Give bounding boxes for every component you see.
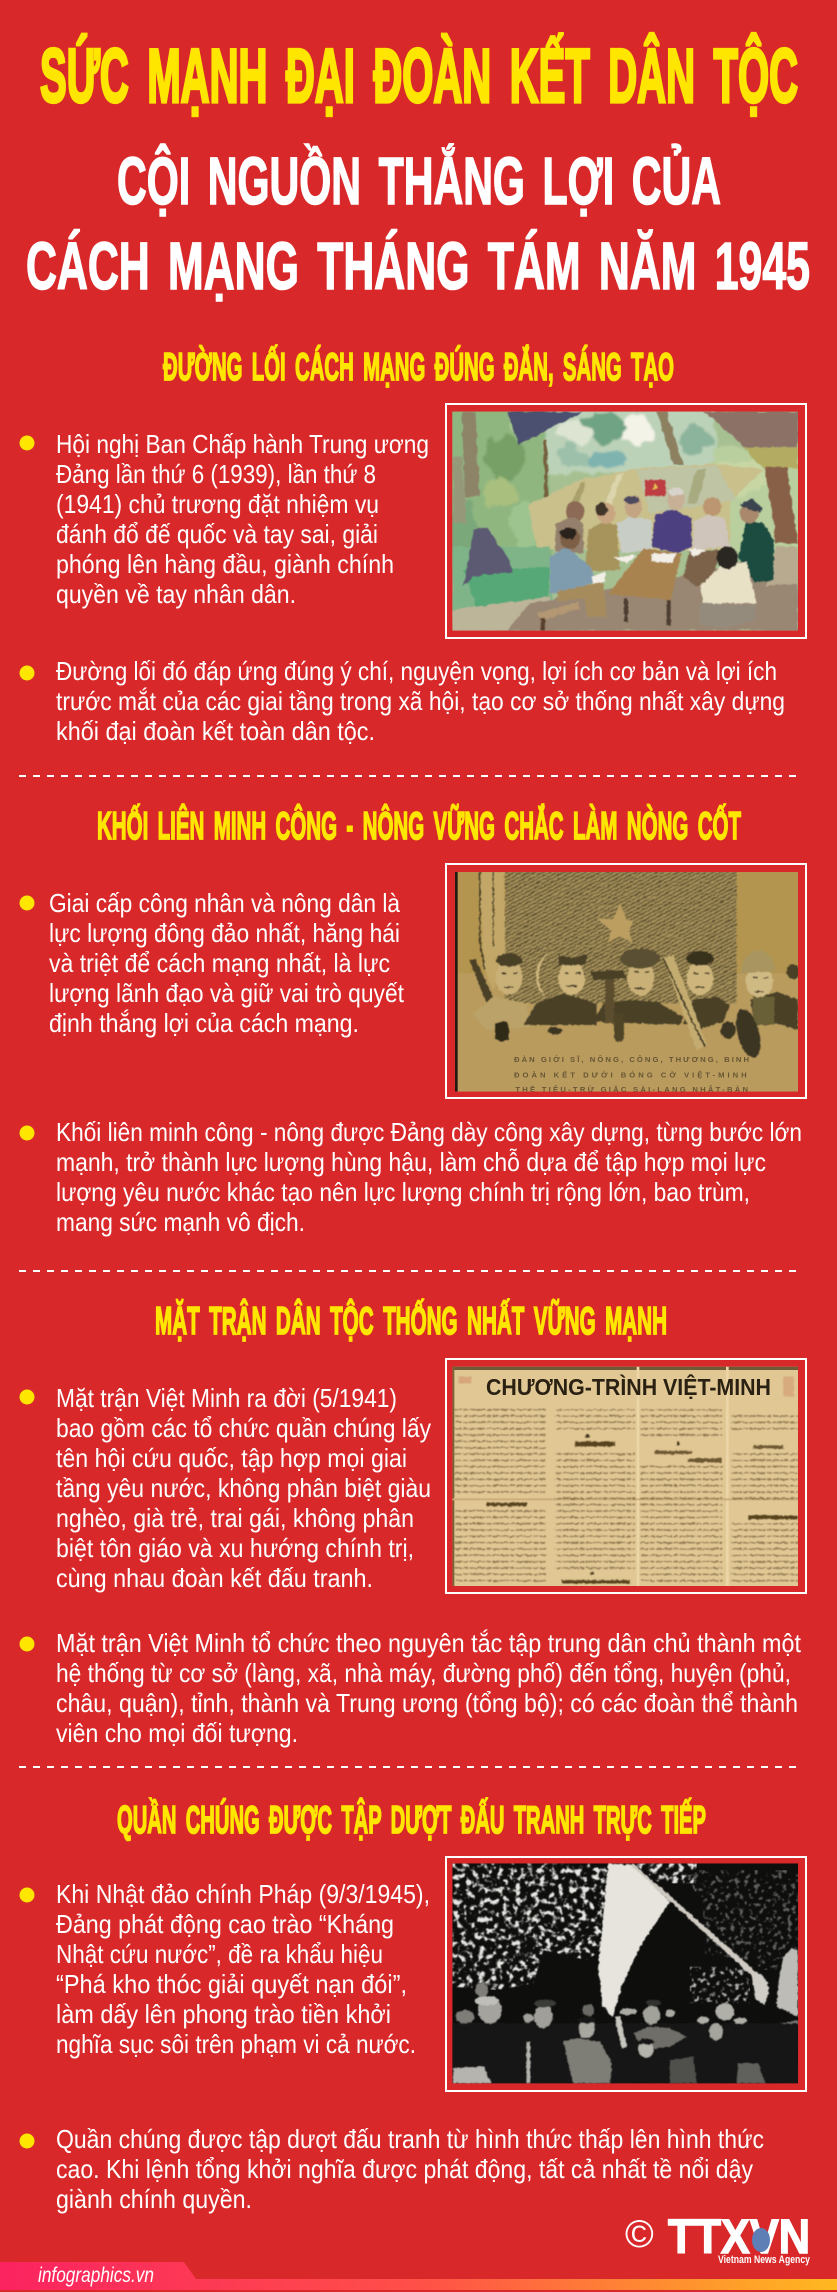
photo frame: crowd with flag bbox=[446, 1857, 806, 2091]
bullet paragraph 1: Nhật cứu nước”, đề ra khẩu hiệu bbox=[56, 1939, 383, 1969]
bullet paragraph 1: (1941) chủ trương đặt nhiệm vụ bbox=[56, 489, 379, 519]
bullet paragraph 2 bbox=[20, 1628, 802, 1748]
bullet paragraph 1: và triệt để cách mạng nhất, là lực bbox=[49, 948, 390, 978]
bullet paragraph 1 bbox=[20, 1879, 430, 2059]
bullet paragraph 1: nghèo, già trẻ, trai gái, không phân bbox=[56, 1503, 414, 1533]
poster caption: ĐÀN GIỚI SĨ, NÔNG, CÔNG, THƯƠNG, BINH bbox=[514, 1055, 749, 1064]
logo: TTXVN bbox=[625, 2211, 811, 2266]
bullet paragraph 1: tên hội cứu quốc, tập hợp mọi giai bbox=[56, 1443, 407, 1473]
footer ribbon bbox=[0, 2262, 837, 2290]
bullet paragraph 1: phóng lên hàng đầu, giành chính bbox=[56, 549, 394, 579]
bullet paragraph 1: quyền về tay nhân dân. bbox=[56, 579, 296, 609]
panel: section 3 bbox=[20, 1298, 806, 1748]
bullet paragraph 2: giành chính quyền. bbox=[56, 2184, 252, 2214]
copyright mark: © bbox=[625, 2213, 654, 2256]
bullet paragraph 1: biệt tôn giáo và xu hướng chính trị, bbox=[56, 1533, 414, 1563]
bullet paragraph 2: mang sức mạnh vô địch. bbox=[56, 1207, 305, 1237]
poster caption: ĐOÀN KẾT DƯỚI BÓNG CỜ VIỆT-MINH bbox=[514, 1069, 747, 1079]
globe bbox=[752, 2228, 770, 2252]
bullet paragraph 2: cao. Khi lệnh tổng khởi nghĩa được phát động, tất cả nhất tề nổi dậy bbox=[56, 2154, 753, 2184]
bullet paragraph 1: tầng yêu nước, không phân biệt giàu bbox=[56, 1473, 431, 1503]
bullet paragraph 1: định thắng lợi của cách mạng. bbox=[49, 1008, 359, 1038]
poster caption: THỀ TIÊU-TRỪ GIẶC SÀI-LANG NHẬT-BẢN bbox=[515, 1084, 748, 1094]
photo frame: painting of the meeting bbox=[443, 403, 807, 638]
bullet paragraph 1 bbox=[20, 429, 429, 609]
footer site name: infographics.vn bbox=[38, 2264, 154, 2287]
bullet paragraph 1: cùng nhau đoàn kết đấu tranh. bbox=[56, 1563, 373, 1593]
photo frame: worker and peasant poster bbox=[446, 864, 806, 1098]
bullet paragraph 1: “Phá kho thóc giải quyết nạn đói”, bbox=[56, 1969, 407, 1999]
bullet paragraph 1: nghĩa sục sôi trên phạm vi cả nước. bbox=[56, 2029, 416, 2059]
bullet paragraph 2: lượng yêu nước khác tạo nên lực lượng chính trị rộng lớn, bao trùm, bbox=[56, 1177, 750, 1207]
bullet paragraph 1: Khi Nhật đảo chính Pháp (9/3/1945), bbox=[56, 1879, 430, 1909]
bullet paragraph 1: bao gồm các tổ chức quần chúng lấy bbox=[56, 1413, 431, 1443]
bullet paragraph 2: Quần chúng được tập dượt đấu tranh từ hình thức thấp lên hình thức bbox=[56, 2124, 764, 2154]
bullet paragraph 1: làm dấy lên phong trào tiền khởi bbox=[56, 1999, 391, 2029]
bullet paragraph 1: lượng lãnh đạo và giữ vai trò quyết bbox=[49, 978, 405, 1008]
bullet paragraph 1: đánh đổ đế quốc và tay sai, giải bbox=[56, 519, 378, 549]
poster caption bbox=[514, 1055, 749, 1094]
bullet paragraph 1: Giai cấp công nhân và nông dân là bbox=[49, 888, 400, 918]
panel: section 4 bbox=[20, 1798, 806, 2214]
bullet paragraph 2 bbox=[20, 2124, 764, 2214]
title bbox=[26, 33, 810, 304]
panel: section 2 bbox=[20, 803, 806, 1237]
wordmark: TTXVN bbox=[668, 2211, 810, 2264]
bullet paragraph 2 bbox=[20, 656, 785, 746]
bullet paragraph 2: mạnh, trở thành lực lượng hùng hậu, làm chỗ dựa để tập hợp mọi lực bbox=[56, 1147, 766, 1177]
bullet paragraph 1: Đảng lần thứ 6 (1939), lần thứ 8 bbox=[56, 459, 376, 489]
panel: section 1 bbox=[20, 344, 807, 746]
bullet paragraph 1 bbox=[20, 888, 405, 1038]
bullet paragraph 2 bbox=[20, 1117, 802, 1237]
bullet paragraph 1: Đảng phát động cao trào “Kháng bbox=[56, 1909, 394, 1939]
bullet paragraph 1: lực lượng đông đảo nhất, hăng hái bbox=[49, 918, 400, 948]
newspaper masthead: CHƯƠNG-TRÌNH VIỆT-MINH bbox=[486, 1373, 771, 1400]
bullet paragraph 2: viên cho mọi đối tượng. bbox=[56, 1718, 298, 1748]
photo frame: Viet Minh programme newspaper bbox=[446, 1359, 806, 1593]
bullet paragraph 1: Mặt trận Việt Minh ra đời (5/1941) bbox=[56, 1383, 397, 1413]
bullet paragraph 1 bbox=[20, 1383, 431, 1593]
bullet paragraph 2: khối đại đoàn kết toàn dân tộc. bbox=[56, 716, 375, 746]
agency name: Vietnam News Agency bbox=[718, 2254, 811, 2266]
bullet paragraph 1: Hội nghị Ban Chấp hành Trung ương bbox=[56, 429, 429, 459]
